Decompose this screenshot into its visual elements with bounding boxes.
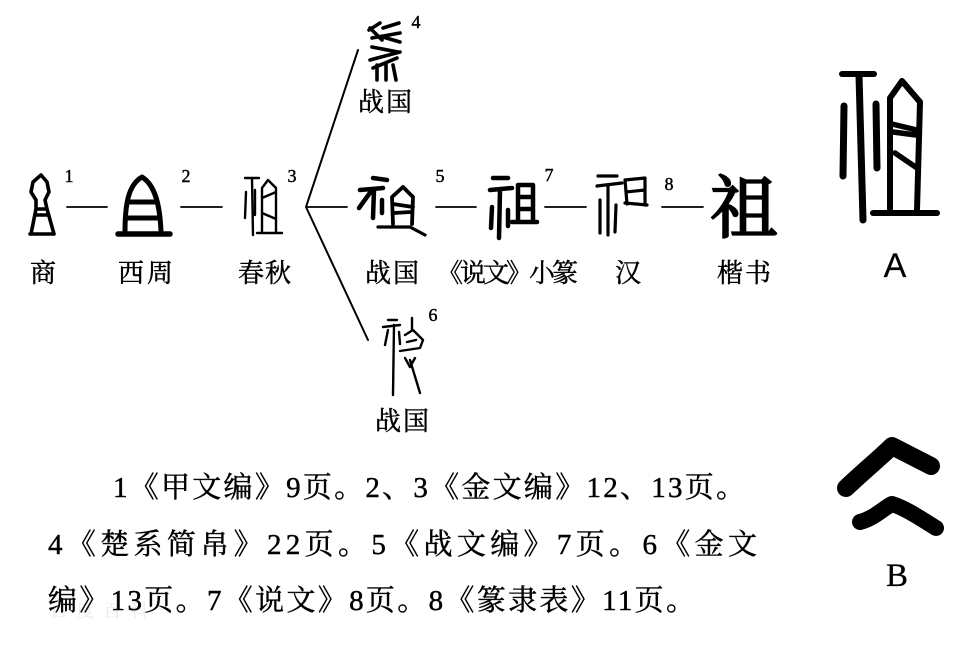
era labels: 春秋 — [238, 259, 291, 288]
superscript reference numbers: 2 — [182, 166, 190, 186]
glyph 3: Spring and Autumn form — [245, 178, 282, 235]
glyph 1: Shang form — [30, 175, 54, 234]
figure B: enlarged roof form — [846, 446, 936, 528]
era labels — [30, 88, 771, 436]
glyph 8: Han form — [597, 176, 647, 235]
source citations: 4《楚系简帛》22页。5《战文编》7页。6《金文 — [48, 528, 757, 561]
glyph 2: Western Zhou form — [118, 177, 170, 234]
source citations: 编》13页。7《说文》8页。8《篆隶表》11页。 — [48, 584, 695, 617]
glyph 5: Warring States form, centre — [359, 178, 425, 235]
era labels: 楷书 — [717, 259, 771, 288]
era labels: 西周 — [118, 259, 173, 288]
superscript reference numbers: 6 — [428, 305, 438, 325]
superscript reference numbers: 4 — [412, 12, 420, 32]
superscript reference numbers: 3 — [288, 166, 296, 186]
figure B label: B — [886, 558, 908, 594]
era labels: 商 — [30, 259, 56, 288]
superscript reference numbers: 8 — [664, 174, 674, 194]
glyph 7: Shuowen small seal form — [490, 178, 537, 238]
era labels: 《说文》小篆 — [437, 259, 578, 288]
superscript reference numbers: 5 — [436, 166, 444, 186]
figure A label: A — [884, 247, 907, 285]
era labels: 汉 — [615, 259, 641, 288]
watermark: 百度百科 — [50, 601, 148, 621]
source citations: 1《甲文编》9页。2、3《金文编》12、13页。 — [113, 471, 745, 504]
era labels: 战国 — [358, 88, 412, 117]
connector lines — [67, 50, 703, 340]
superscript reference numbers: 7 — [544, 165, 554, 185]
superscript reference numbers — [64, 12, 674, 325]
era labels: 战国 — [365, 259, 419, 288]
glyph: regular script 祖: 祖 — [710, 155, 778, 252]
glyph 6: Warring States form, lower branch — [383, 318, 423, 395]
superscript reference numbers: 1 — [64, 166, 74, 186]
figure A: enlarged bronze form — [842, 74, 937, 220]
source citations — [48, 471, 757, 617]
era labels: 战国 — [375, 407, 429, 436]
glyph 4: Warring States form, upper branch — [369, 23, 400, 80]
